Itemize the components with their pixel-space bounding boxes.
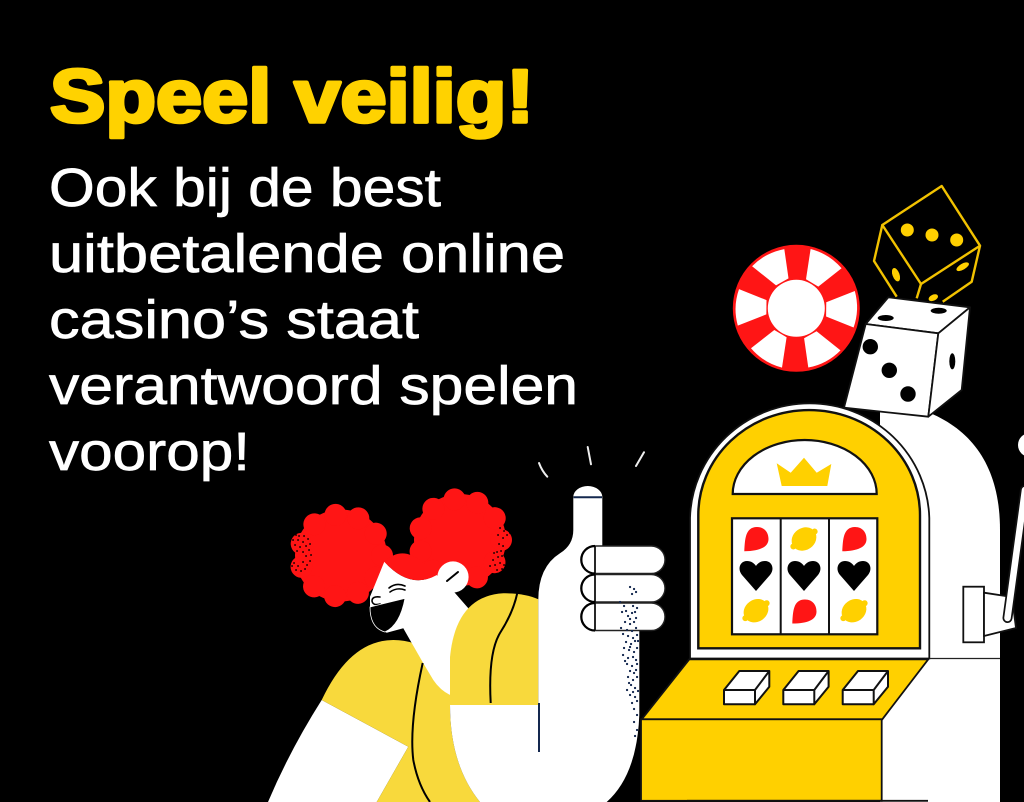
- text block: message: [49, 158, 578, 482]
- title: Speel veilig!: [50, 54, 534, 138]
- text block: message: uitbetalende online: [49, 224, 565, 284]
- icon: casino chip: [722, 239, 870, 377]
- buttons: [724, 671, 888, 704]
- text block: message: Ook bij de best: [49, 158, 441, 218]
- hair buns: [295, 494, 506, 602]
- arch housing: [690, 403, 929, 658]
- crown window: [733, 440, 877, 494]
- text block: message: casino’s staat: [49, 290, 419, 350]
- reels: [732, 518, 877, 634]
- yellow front panel: [698, 410, 920, 648]
- machine back cabinet: [880, 402, 1000, 802]
- torso: [322, 640, 480, 802]
- attention rays: [539, 447, 644, 477]
- ear: [437, 561, 469, 593]
- text block: message: verantwoord spelen: [49, 356, 578, 416]
- slot machine: [641, 402, 1024, 802]
- left sleeve: [268, 700, 408, 802]
- mouth: [370, 598, 405, 632]
- clothing lines: [412, 593, 517, 802]
- fingers: [581, 546, 665, 630]
- hair fringe: [384, 553, 437, 580]
- console top: [642, 659, 928, 719]
- character: woman giving thumbs up: [268, 447, 665, 802]
- arm speckles: [620, 587, 638, 736]
- icon: white die: [844, 297, 970, 417]
- forearm and thumb: [450, 486, 639, 802]
- icon: yellow outline die: [874, 186, 980, 303]
- lever: [963, 433, 1024, 642]
- hair speckles: [292, 528, 510, 571]
- console front: [641, 719, 882, 801]
- face and neck: [370, 562, 468, 695]
- text block: message: voorop!: [49, 422, 250, 482]
- eye and nose: [372, 584, 405, 605]
- upper arm: [450, 593, 538, 705]
